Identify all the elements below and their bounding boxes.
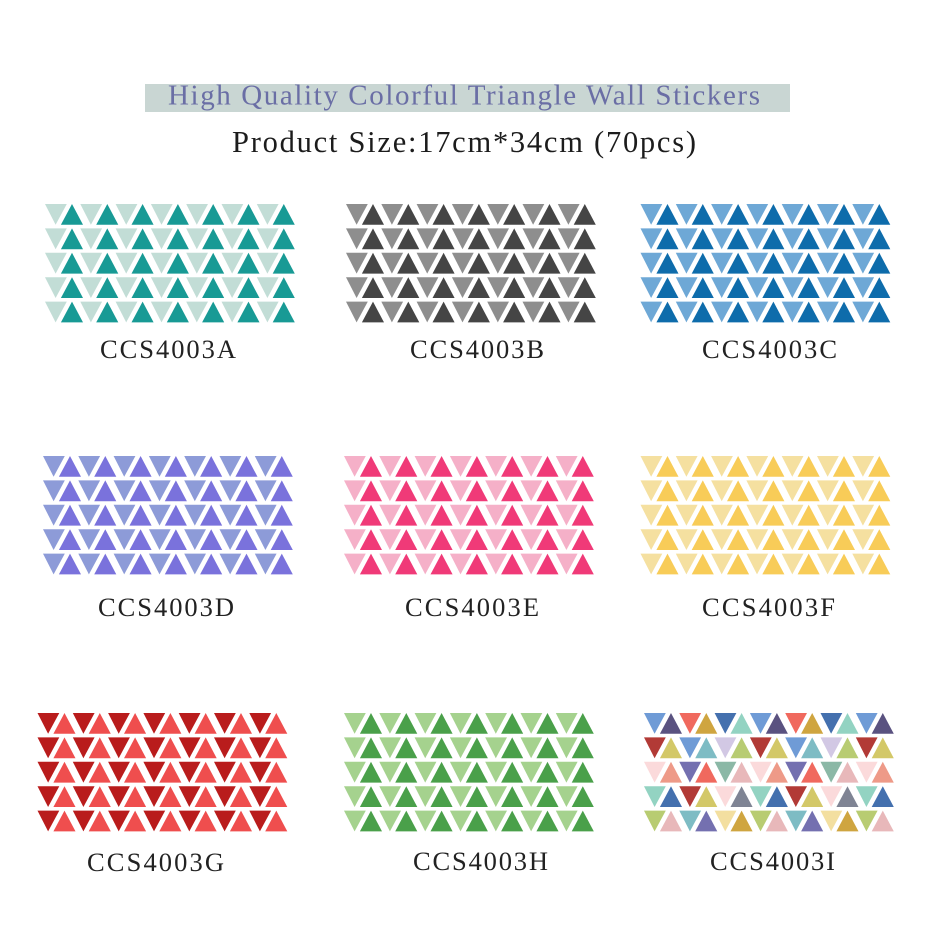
label H: CCS4003H: [413, 846, 548, 876]
panel: CCS4003A: [45, 204, 295, 364]
panel: CCS4003F: [640, 456, 890, 622]
label A: CCS4003A: [100, 334, 236, 364]
panel: CCS4003D: [43, 456, 293, 622]
panel: CCS4003E: [344, 456, 594, 622]
label B: CCS4003B: [410, 334, 544, 364]
triangle pattern D: [43, 456, 293, 574]
panel: CCS4003H: [344, 713, 594, 876]
title band: High Quality Colorful Triangle Wall Stickers: [168, 80, 760, 112]
label E: CCS4003E: [405, 592, 539, 622]
label D: CCS4003D: [98, 592, 234, 622]
triangle pattern E: [344, 456, 594, 574]
triangle pattern F: [640, 456, 890, 574]
triangle pattern H: [344, 713, 594, 831]
triangle pattern A: [45, 204, 295, 322]
panel: CCS4003B: [346, 204, 596, 364]
label G: CCS4003G: [87, 847, 224, 877]
triangle pattern G: [38, 713, 287, 831]
panel: CCS4003C: [640, 204, 890, 364]
subtitle: product size: Product Size:17cm*34cm (70pcs): [232, 125, 696, 159]
triangle pattern C: [640, 204, 890, 322]
triangle pattern I multicolor: [644, 713, 894, 831]
panel: CCS4003G: [38, 713, 287, 877]
label I: CCS4003I: [710, 846, 835, 876]
panel: CCS4003I: [644, 713, 894, 876]
triangle pattern B: [346, 204, 596, 322]
label C: CCS4003C: [702, 334, 837, 364]
label F: CCS4003F: [702, 592, 835, 622]
